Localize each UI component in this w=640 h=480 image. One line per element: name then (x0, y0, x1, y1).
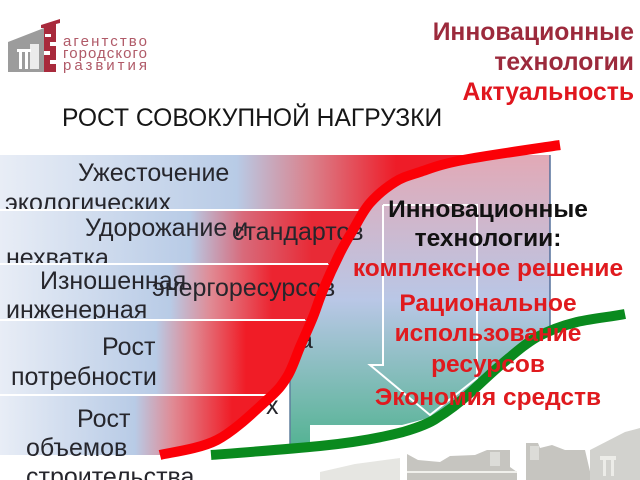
title: Актуальность (462, 79, 634, 106)
panel: row 5 (0, 396, 271, 480)
center text: ресурсов (431, 351, 545, 378)
title: технологии (494, 49, 634, 76)
white row lines (0, 210, 358, 395)
arrow: white down arrow (370, 205, 477, 415)
logo text: агентство (63, 33, 147, 50)
panel: row 2: Удорожание и (85, 214, 248, 242)
panel: row 1: экологических (5, 189, 172, 217)
logo text: развития (63, 57, 147, 74)
green curve (211, 314, 625, 455)
title (433, 19, 634, 106)
panel: row 5: объемов (26, 434, 127, 462)
panel: row 2: нехватка (6, 244, 109, 272)
panel: row 3: Изношенная (40, 267, 186, 295)
overlay text (152, 218, 364, 420)
center text: технологии: (415, 225, 561, 252)
panel: row 4: потребности (11, 363, 157, 391)
center text (353, 196, 623, 411)
panel: row 3 (0, 265, 335, 324)
logo (8, 19, 147, 74)
logo text (63, 33, 147, 74)
overlay text: энергоресурсов (152, 274, 335, 302)
overlay text: х (266, 392, 279, 420)
center text: Инновационные (388, 196, 588, 223)
overlay text: а (299, 326, 313, 354)
heading: РОСТ СОВОКУПНОЙ НАГРУЗКИ (62, 104, 442, 132)
red curve (160, 145, 560, 455)
panel: row 4 (0, 321, 312, 395)
panel: row 4: Рост (102, 333, 156, 361)
title: Инновационные (433, 19, 634, 46)
center text: Рациональное (399, 290, 577, 317)
panel: right gradient (290, 155, 550, 445)
panel: row 1 (0, 155, 462, 209)
logo text: городского (63, 45, 147, 62)
panel: row 1: Ужесточение (78, 159, 229, 187)
icon: logo building (8, 19, 60, 72)
panel: row 3: инженерная (6, 296, 147, 324)
skyline (320, 428, 640, 480)
overlay text: стандартов (232, 218, 364, 246)
center text: использование (395, 320, 581, 347)
center text: Экономия средств (375, 384, 601, 411)
center text: комплексное решение (353, 255, 623, 282)
panel: row 5: Рост (77, 405, 131, 433)
panel: row 2 (0, 211, 358, 264)
